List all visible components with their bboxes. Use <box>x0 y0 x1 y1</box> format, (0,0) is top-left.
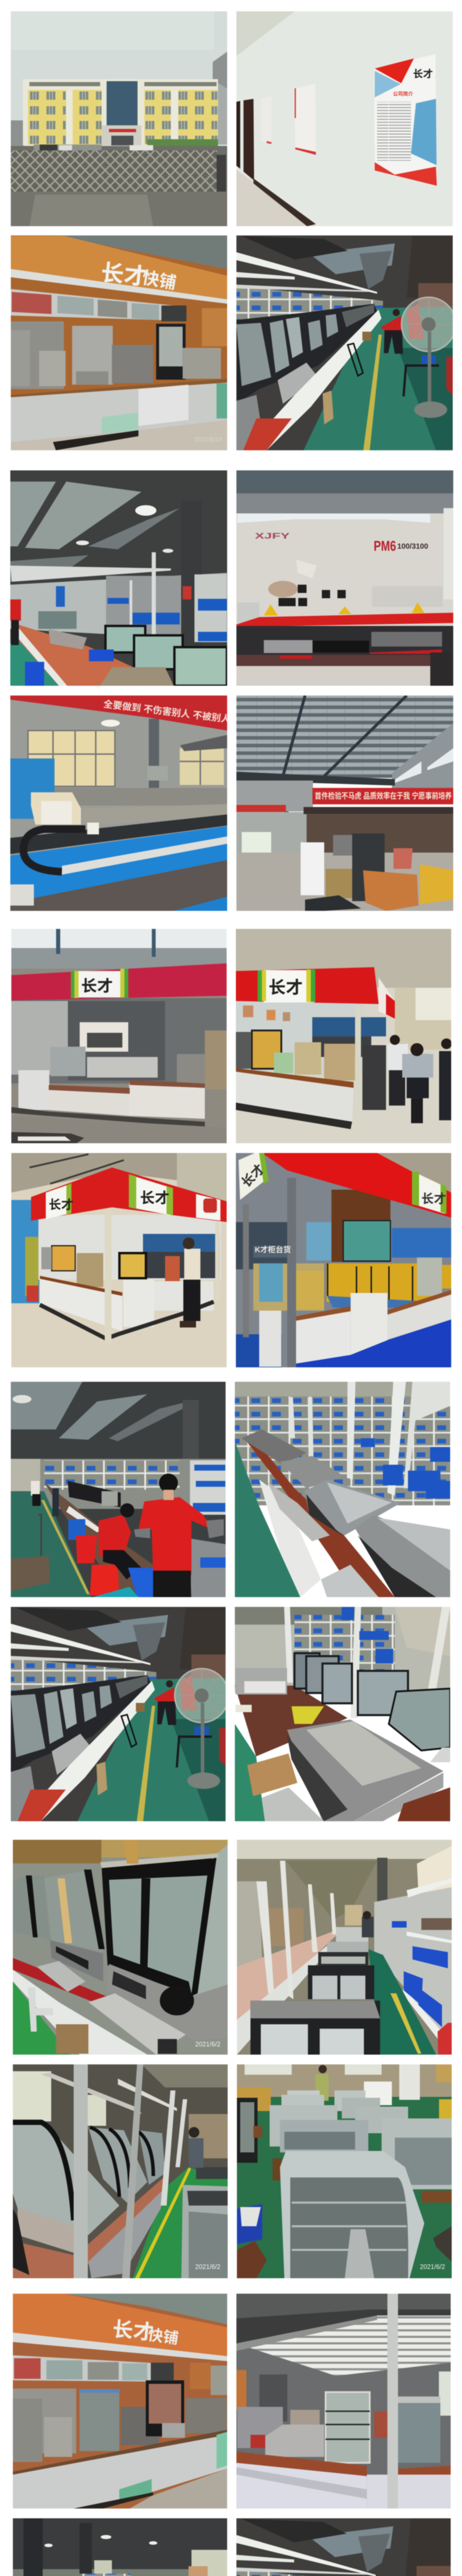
photo: corridor wall with company posters <box>236 11 453 227</box>
photo: steel warehouse interior with red banners <box>236 695 454 911</box>
photo: KV quick shop with appliances, second view: 长才 <box>111 2318 155 2344</box>
photo: press brake machine PM6 100/3100 <box>236 470 454 686</box>
photo: assembly line with fan (repeat) <box>10 1606 226 1822</box>
photo: kiosk with slat ceiling under construction <box>236 2293 451 2509</box>
photo: kiosk at trade show with visitors <box>235 928 452 1144</box>
photo: factory building with gate <box>10 11 228 227</box>
photo: assembly line with shelves <box>10 470 228 686</box>
photo: KV quick shop with appliances, second view <box>12 2293 228 2509</box>
photo: display case close-up with compressor: 2021/6/2 <box>195 2041 220 2048</box>
photo: corridor wall with company posters: 公司简介 <box>393 91 413 97</box>
photo: kiosk corner view with man <box>11 1153 227 1368</box>
photo: kiosk at trade show with visitors: 长才 <box>269 978 303 997</box>
photo: workers in red shirts on assembly line <box>10 1381 226 1598</box>
photo: press brake machine PM6 100/3100: PM6 <box>374 538 396 554</box>
sign: KV logo and shop name <box>99 260 178 293</box>
photo: corridor wall with company posters: 长才 <box>413 69 433 80</box>
photo: kiosk corner view with man: 长才 <box>140 1190 169 1207</box>
photo: kiosk with TV and golden display cases: K才柜台货 <box>255 1245 291 1255</box>
photo: kiosk with red fascia in workshop <box>11 928 227 1144</box>
photo: laser cutting machine <box>10 695 228 911</box>
photo: press brake machine PM6 100/3100: XJFY <box>255 532 290 541</box>
photo: display cases and steel unit on bench <box>234 1606 451 1822</box>
photo: curved display cases, man in grey <box>12 2064 228 2279</box>
visitors <box>387 1035 452 1123</box>
photo: steel refrigeration units on bench <box>234 1381 451 1598</box>
photo: line of cabinets on bench, blue bins <box>236 1839 452 2055</box>
photo: press brake machine PM6 100/3100: 100/3100 <box>397 543 428 551</box>
sign: KV logo and shop name: 快铺 <box>141 268 178 293</box>
photo: curved display cases, man in grey: 2021/6/2 <box>195 2263 220 2270</box>
photo: KV quick shop with appliances, second view: 快铺 <box>147 2326 179 2347</box>
photo: wrapped cabinets on pallets in factory <box>12 2518 228 2576</box>
photo: KV quick shop display with appliances: 2021/6/10 <box>194 436 222 443</box>
photo: plastic wrapped display cases <box>236 2064 452 2279</box>
photo: kiosk with red fascia in workshop: 长才 <box>81 977 113 995</box>
photo: KV quick shop display with appliances <box>10 235 228 451</box>
photo: assembly line with fan <box>236 235 453 451</box>
photo: kiosk corner view with man: 长才 <box>49 1198 74 1212</box>
photo: kiosk with TV and golden display cases: 长才 <box>239 1162 267 1190</box>
photo: assembly line with fan (third view) <box>236 2518 451 2576</box>
sign: KV logo and shop name: 长才 <box>99 260 148 290</box>
photo: kiosk with TV and golden display cases <box>235 1153 452 1368</box>
photo: kiosk with TV and golden display cases: 长才 <box>421 1192 446 1206</box>
photo: plastic wrapped display cases: 2021/6/2 <box>420 2263 445 2270</box>
photo: display case close-up with compressor <box>12 1839 228 2055</box>
